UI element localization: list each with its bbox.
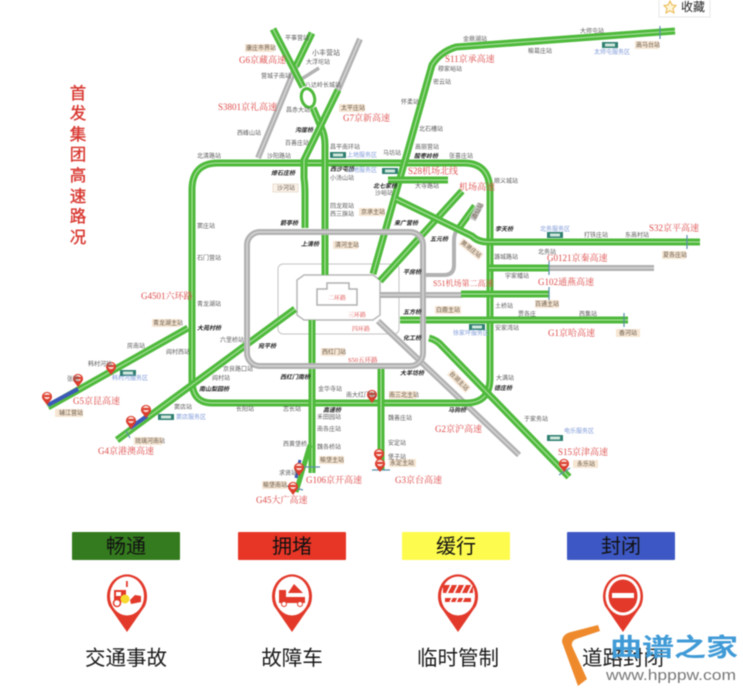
expressway names: S15京津高速 (558, 446, 608, 457)
station labels: 西三旗站 (330, 210, 354, 218)
service area labels: 上地服务区 (347, 151, 377, 159)
interchange labels: 马驹桥 (448, 406, 467, 414)
station labels: 志长站 (283, 405, 301, 413)
toll station tags: 榆垡主站 (320, 456, 344, 464)
toll station tags: 辅江营站 (59, 409, 83, 417)
interchange labels: 大羊坊桥 (400, 369, 425, 377)
station labels: 宇家幡站 (505, 272, 529, 280)
station labels: 求贤站 (279, 469, 297, 477)
station labels: 马坊站 (383, 149, 401, 157)
toll station tags: 京承主站 (361, 208, 385, 216)
station labels: 大满站 (496, 374, 514, 382)
road: S15 Jingjin (429, 338, 569, 477)
interchange labels: 化工桥 (403, 334, 422, 342)
expressway names: S28机场北线 (408, 165, 458, 176)
interchange labels: 五元桥 (430, 235, 449, 243)
road: G3 Jingtai (378, 369, 384, 470)
expressway names: 三环路 (348, 311, 366, 319)
title: 路 (70, 207, 87, 226)
road: G5 Jingkun (48, 328, 188, 407)
toll station tags: 琉璃河南站 (135, 437, 165, 445)
station labels: 百善庄站 (285, 139, 309, 147)
watermark: 曲谱之家 (610, 633, 738, 662)
expressway names: S3801京礼高速 (218, 101, 277, 112)
station labels: 金鼎湖站 (463, 35, 487, 43)
expressway names: G7京新高速 (343, 112, 390, 123)
toll station tags (55, 41, 687, 489)
station labels: 于家务站 (524, 415, 548, 423)
title: 首 (70, 84, 86, 103)
watermark (562, 625, 738, 686)
station labels: 禾田园站 (317, 413, 341, 421)
road: S11 Jingcheng (373, 31, 675, 274)
toll station tags: 酒仙站 (470, 201, 485, 221)
legend: smooth (72, 532, 180, 560)
station labels: 怀柔站 (401, 98, 419, 106)
station labels: 六里桥站 (220, 336, 244, 344)
expressway names: G5京昆高速 (73, 395, 120, 406)
interchange labels: 燎石庄桥 (271, 169, 296, 177)
expressway names: S50五环路 (348, 355, 378, 364)
expressway names: G106京开高速 (306, 474, 362, 485)
station labels: 昌平南环站 (330, 143, 360, 151)
station labels: 西峰山站 (237, 129, 261, 137)
station labels: 土桥站 (495, 302, 513, 310)
station labels: 长阳站 (236, 405, 254, 413)
expressway names: 机场高速 (459, 181, 495, 192)
service area markers (120, 42, 618, 441)
road: G106 Jingkai (308, 320, 316, 473)
caption: traffic accident: 交通事故 (85, 647, 167, 670)
interchange labels: 西红门南桥 (280, 373, 311, 381)
station labels: 北清路站 (197, 152, 221, 160)
expressway names: 二环路 (328, 294, 346, 302)
station labels: 南各庄站 (317, 425, 341, 433)
interchange labels: 德庄桥 (494, 384, 513, 392)
station labels: 西黄垡桥 (283, 440, 307, 448)
toll station tags: 夏各庄站 (663, 251, 687, 259)
expressway names: G3京台高速 (395, 474, 442, 485)
station labels: 小丰营站 (312, 48, 340, 57)
station labels: 昌赤大站 (286, 106, 310, 114)
expressway names: G45大广高速 (256, 494, 308, 505)
caption: temporary control: 临时管制 (417, 647, 499, 670)
station labels: 安定站 (388, 439, 406, 447)
legend: smooth: 畅通 (106, 535, 146, 558)
expressway names: S11京承高速 (445, 53, 495, 64)
interchange labels: 宛平桥 (258, 342, 277, 350)
station labels: 堡子站 (388, 453, 406, 461)
station labels: 东高村站 (625, 231, 649, 239)
interchange labels (197, 126, 514, 414)
toll station tags: 太平庄站 (341, 104, 365, 112)
interchange labels: 南山梨园桥 (199, 385, 230, 393)
service area labels: 电乐服务区 (564, 427, 594, 435)
toll station tags: 白鹿主站 (436, 306, 460, 314)
road: S51 east green section (461, 290, 549, 298)
station labels: 小汤山站 (330, 174, 354, 182)
toll station tags: 台湖主站 (448, 370, 470, 392)
station labels: 回龙观站 (330, 202, 354, 210)
expressway names: G4501六环路 (141, 290, 192, 301)
station labels: 张坊 (67, 375, 79, 383)
station labels: 沙阳路站 (267, 152, 291, 160)
station labels: 八达岭长城站 (305, 81, 341, 89)
toll station tags: 青龙湖主站 (153, 319, 183, 327)
station labels: 金华寺站 (318, 385, 342, 393)
expressway names (73, 53, 699, 505)
road: G4 Jinggangao (117, 309, 295, 440)
title (70, 84, 87, 247)
favorite button (659, 0, 710, 17)
interchange labels: 酸枣岭桥 (414, 152, 439, 160)
expressway names: G4京港澳高速 (98, 445, 154, 456)
station labels: 魏各桥站 (317, 443, 341, 451)
map incident pins (42, 362, 569, 495)
ring road: sixth ring (192, 163, 490, 403)
station labels: 贾各庄 (518, 310, 536, 318)
title: 集 (70, 125, 86, 144)
legend: congested: 拥堵 (272, 535, 312, 558)
interchange labels: 平房桥 (403, 268, 422, 276)
service area labels: 徐家坪服务区 (453, 329, 489, 337)
station labels: 京良路口站 (223, 365, 253, 373)
station labels: 打铁庄站 (584, 231, 608, 239)
interchange labels: 李天桥 (495, 225, 514, 233)
expressway names: G6京藏高速 (239, 54, 286, 65)
toll station tags: 永乐站 (577, 460, 595, 468)
toll station tags: 黄港庄站 (459, 238, 483, 260)
caption: road closure: 道路封闭 (582, 647, 664, 670)
interchange labels: 北七家桥 (373, 182, 398, 190)
road: G7 Jingxin (304, 90, 338, 228)
expressway names: S51机场第二高速 (433, 278, 493, 288)
service area labels: 韩村河服务区 (112, 374, 148, 382)
gray expressway segments (258, 39, 654, 455)
toll station tags: 沙河站 (277, 184, 295, 192)
toll station tags: 西红门站 (322, 348, 346, 356)
toll station tags: 永定主站 (390, 459, 414, 467)
interchange labels: 西沙屯桥 (330, 165, 355, 173)
icon: broken down vehicle pin (272, 574, 312, 632)
station labels: 大师屯站 (580, 27, 604, 35)
station labels: 青龙湖站 (197, 300, 221, 308)
expressway names: G1京哈高速 (548, 327, 595, 338)
expressway names: 四环路 (352, 325, 370, 333)
service area labels: 太师屯服务区 (594, 48, 630, 56)
station labels: 韩村河站 (88, 360, 112, 368)
interchange labels: 来广营桥 (394, 219, 419, 227)
service area labels: 北务服务区 (540, 225, 570, 233)
interchange labels: 大苑村桥 (197, 324, 222, 332)
title: 速 (70, 187, 86, 206)
expressway names: G2京沪高速 (435, 423, 482, 434)
legend: congested (238, 532, 346, 560)
road: S32 Jingping (396, 199, 700, 242)
legend: closed (567, 532, 675, 560)
station labels: 穆家峪站 (438, 65, 462, 73)
station labels: 平事营站 (285, 34, 309, 42)
toll station tags: 百通主站 (535, 300, 559, 308)
caption: broken down vehicle: 故障车 (261, 647, 323, 670)
road: G45 Daguang (296, 445, 310, 492)
service area labels: 窦店服务区 (176, 413, 206, 421)
favorite button: 收藏 (681, 0, 705, 14)
toll station tags: 康庄市界站 (246, 44, 276, 52)
icon: road closure pin (603, 574, 643, 632)
station labels: 潞城路站 (494, 253, 518, 261)
inner rings (278, 264, 399, 334)
legend: slow: 缓行 (436, 535, 476, 558)
station labels: 魏善庄站 (388, 414, 412, 422)
toll station tags: 榆垡南站 (263, 481, 287, 489)
title: 团 (70, 146, 86, 164)
toll station tags: 高马台站 (636, 41, 660, 49)
station labels: 南大红门站 (346, 391, 376, 399)
icon: temporary control pin (438, 574, 478, 632)
expressway names: G102通燕高速 (538, 276, 594, 287)
interchange labels: 上清桥 (301, 240, 320, 248)
interchange labels: 五方桥 (403, 308, 422, 316)
station labels: 沙峪站 (375, 189, 393, 197)
title: 高 (70, 166, 86, 185)
road: G6 Jingzang (273, 29, 325, 275)
toll station tags: 清河主站 (335, 241, 359, 249)
station labels: 窦店站 (174, 403, 192, 411)
station labels: 张喜庄站 (449, 152, 473, 160)
legend: slow (402, 532, 510, 560)
station labels: 窦庄站 (197, 222, 215, 230)
road: G0121 Jingqin green section (489, 264, 549, 272)
station labels: 安家湾站 (495, 324, 519, 332)
station labels: 阎村站 (212, 374, 230, 382)
station labels: 西集站 (579, 310, 597, 318)
title: 发 (70, 104, 86, 123)
toll gates (126, 26, 687, 490)
interchange labels: 箭亭桥 (280, 219, 299, 227)
watermark: www.hpppw.com (605, 667, 736, 684)
expressway names: S32京平高速 (649, 222, 699, 233)
service area labels (112, 48, 630, 435)
road: G1 Jingha (400, 316, 628, 324)
station labels: 营城子南站 (261, 72, 291, 80)
station labels: 阎村西站 (166, 348, 190, 356)
road: airport expressway (380, 191, 462, 281)
station labels (67, 27, 649, 477)
interchange labels: 沟崖桥 (295, 126, 314, 134)
station labels: 大浮坨站 (306, 58, 330, 66)
station labels: 高丽营站 (415, 143, 439, 151)
title: 况 (70, 229, 86, 247)
road: S51 green section (459, 206, 475, 228)
station labels: 北石槽站 (419, 125, 443, 133)
ring road: fifth ring (247, 232, 423, 366)
station labels: 北务站 (538, 248, 556, 256)
station labels: 榆葛庄站 (528, 47, 552, 55)
station labels: 石门营站 (197, 254, 221, 262)
station labels: 大寺路站 (415, 182, 439, 190)
legend: closed: 封闭 (601, 535, 641, 558)
interchange labels: 高速桥 (323, 406, 342, 414)
expressway names: G0121京秦高速 (547, 252, 608, 263)
service area labels: 上地服务区 (347, 166, 377, 174)
road: S28 airport north (388, 176, 448, 184)
station labels: 顺义城站 (494, 177, 518, 185)
station labels: 房南站 (127, 342, 145, 350)
station labels: 密云站 (433, 78, 451, 86)
icon: traffic accident pin (107, 574, 147, 632)
toll station tags: 香河站 (619, 329, 637, 337)
toll station tags: 南三北主站 (389, 391, 419, 399)
